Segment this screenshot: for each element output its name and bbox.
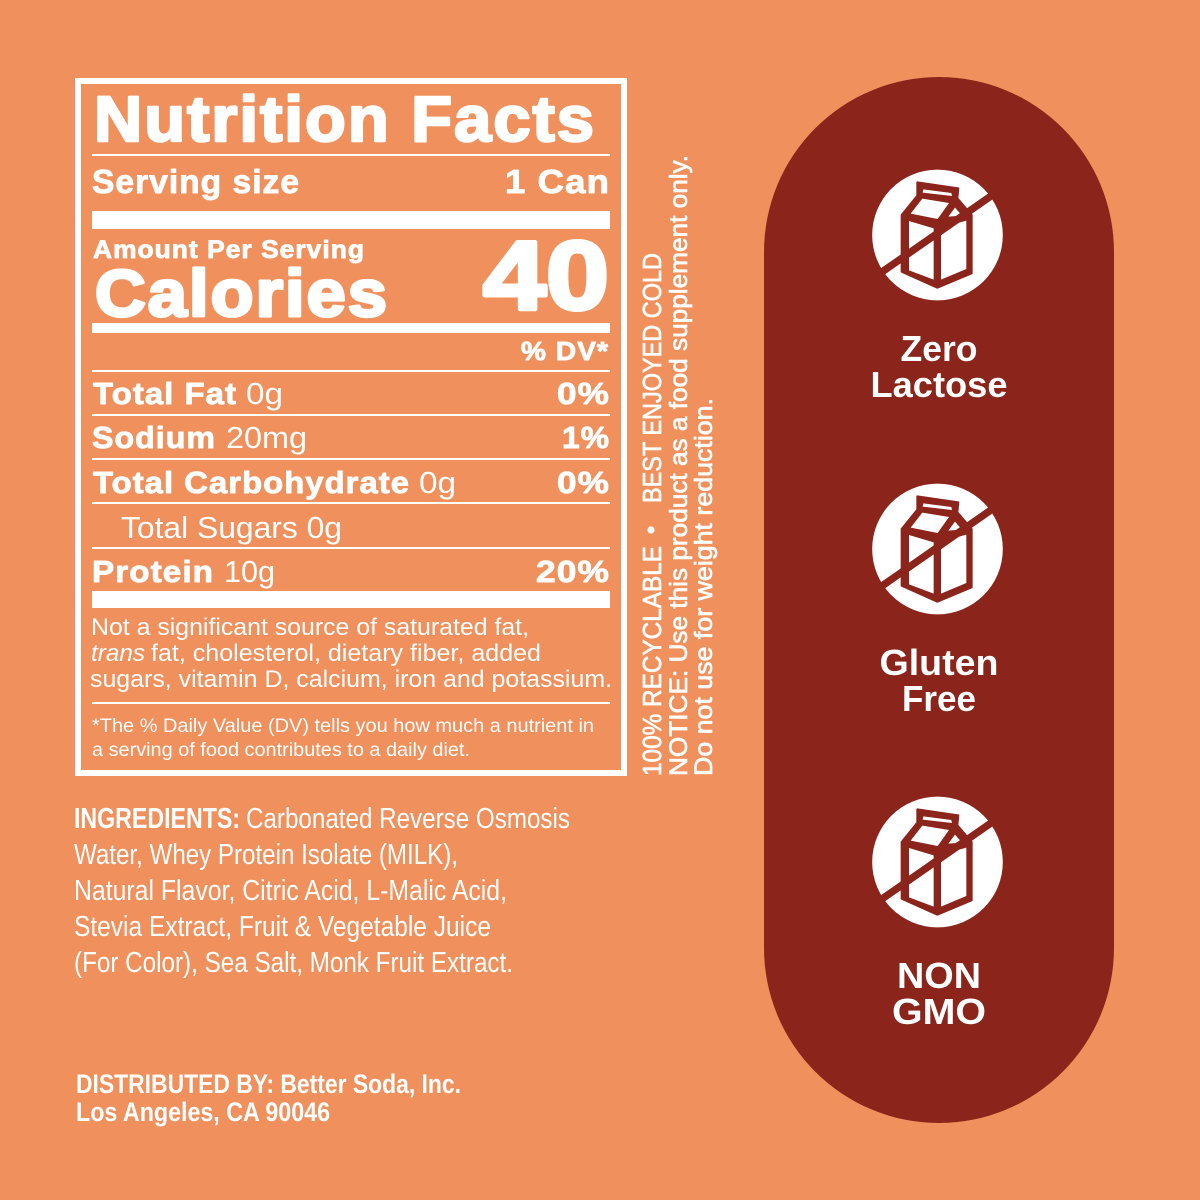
- row: total sugars: Total Sugars 0g: [121, 510, 342, 545]
- text: ingredients: Water, Whey Protein Isolate (MILK),: [74, 839, 458, 871]
- row: total carbohydrate: Total Carbohydrate: [93, 465, 410, 500]
- panel: nutrition facts label: [78, 81, 624, 773]
- panel: dietary claims pill: [764, 77, 1114, 1123]
- row: serving size: Serving size: [92, 163, 300, 200]
- row: total carbohydrate: [93, 465, 610, 500]
- row: total carbohydrate: 0g: [419, 465, 456, 500]
- text: distributed by: Los Angeles, CA 90046: [76, 1097, 330, 1127]
- text: not a significant source note: sugars, vitamin D, calcium, iron and potassium.: [90, 666, 612, 693]
- text: Zero Lactose: Lactose: [870, 364, 1008, 405]
- row: serving size: [92, 163, 610, 200]
- text: Gluten Free: Free: [902, 678, 976, 719]
- text: daily value footnote: *The % Daily Value (DV) tells you how much a nutrient in: [92, 715, 594, 737]
- text: daily value footnote: a serving of food contributes to a daily diet.: [92, 739, 470, 761]
- row: protein: Protein: [92, 554, 214, 589]
- row: sodium: [92, 420, 610, 455]
- text: Gluten Free: Gluten: [880, 642, 998, 683]
- row: total fat: 0%: [557, 376, 610, 411]
- text: ingredients: [74, 803, 570, 979]
- text: NON GMO: NON: [897, 955, 981, 996]
- row: sodium: 20mg: [226, 420, 307, 455]
- text: ingredients: Stevia Extract, Fruit & Vegetable Juice: [74, 911, 491, 943]
- row: total fat: 0g: [246, 376, 283, 411]
- text: amount per serving: Amount Per Serving: [93, 236, 365, 264]
- text: not a significant source note: fat, cholesterol, dietary fiber, added: [151, 640, 541, 667]
- row: sodium: 1%: [562, 420, 610, 455]
- text: percent DV header: % DV*: [521, 336, 609, 366]
- heading: Nutrition Facts: Nutrition Facts: [94, 83, 596, 155]
- row: total fat: [93, 376, 610, 411]
- text: not a significant source note: Not a significant source of saturated fat,: [91, 614, 529, 641]
- text: NON GMO: GMO: [892, 991, 986, 1032]
- row: serving size: 1 Can: [505, 163, 610, 200]
- text: Gluten Free: [880, 642, 998, 719]
- text: not a significant source note: trans: [91, 640, 145, 667]
- icon: crossed milk carton (zero lactose): [872, 170, 1003, 300]
- number: calories 40: 40: [483, 221, 609, 330]
- text: ingredients: INGREDIENTS:: [74, 803, 240, 835]
- text: rotated notice: NOTICE: Use this product as a food supplement only.: [665, 155, 693, 776]
- row: protein: 20%: [536, 554, 610, 589]
- text: Zero Lactose: [870, 328, 1008, 405]
- text: distributed by: [76, 1069, 461, 1127]
- text: rotated notice: [637, 155, 718, 776]
- text: rotated notice: Do not use for weight reduction.: [690, 398, 718, 776]
- row: protein: 10g: [224, 554, 275, 589]
- text: ingredients: Natural Flavor, Citric Acid, L-Malic Acid,: [74, 875, 507, 907]
- icon: crossed milk carton (gluten free): [872, 484, 1003, 614]
- text: distributed by: DISTRIBUTED BY: Better Soda, Inc.: [76, 1069, 461, 1099]
- text: Zero Lactose: Zero: [900, 328, 978, 369]
- row: total carbohydrate: 0%: [557, 465, 610, 500]
- row: sodium: Sodium: [92, 420, 216, 455]
- text: not a significant source note: [90, 614, 612, 693]
- text: ingredients: (For Color), Sea Salt, Monk Fruit Extract.: [74, 947, 513, 979]
- text: rotated notice: BEST ENJOYED COLD: [637, 253, 667, 503]
- icon: crossed milk carton (non GMO): [872, 797, 1003, 927]
- row: protein: [92, 554, 610, 589]
- text: calories: Calories: [95, 256, 389, 330]
- text: daily value footnote: [92, 715, 594, 761]
- text: NON GMO: [892, 955, 986, 1032]
- row: total fat: Total Fat: [93, 376, 237, 411]
- text: ingredients: Carbonated Reverse Osmosis: [246, 803, 570, 835]
- text: rotated notice: 100% RECYCLABLE: [637, 546, 667, 776]
